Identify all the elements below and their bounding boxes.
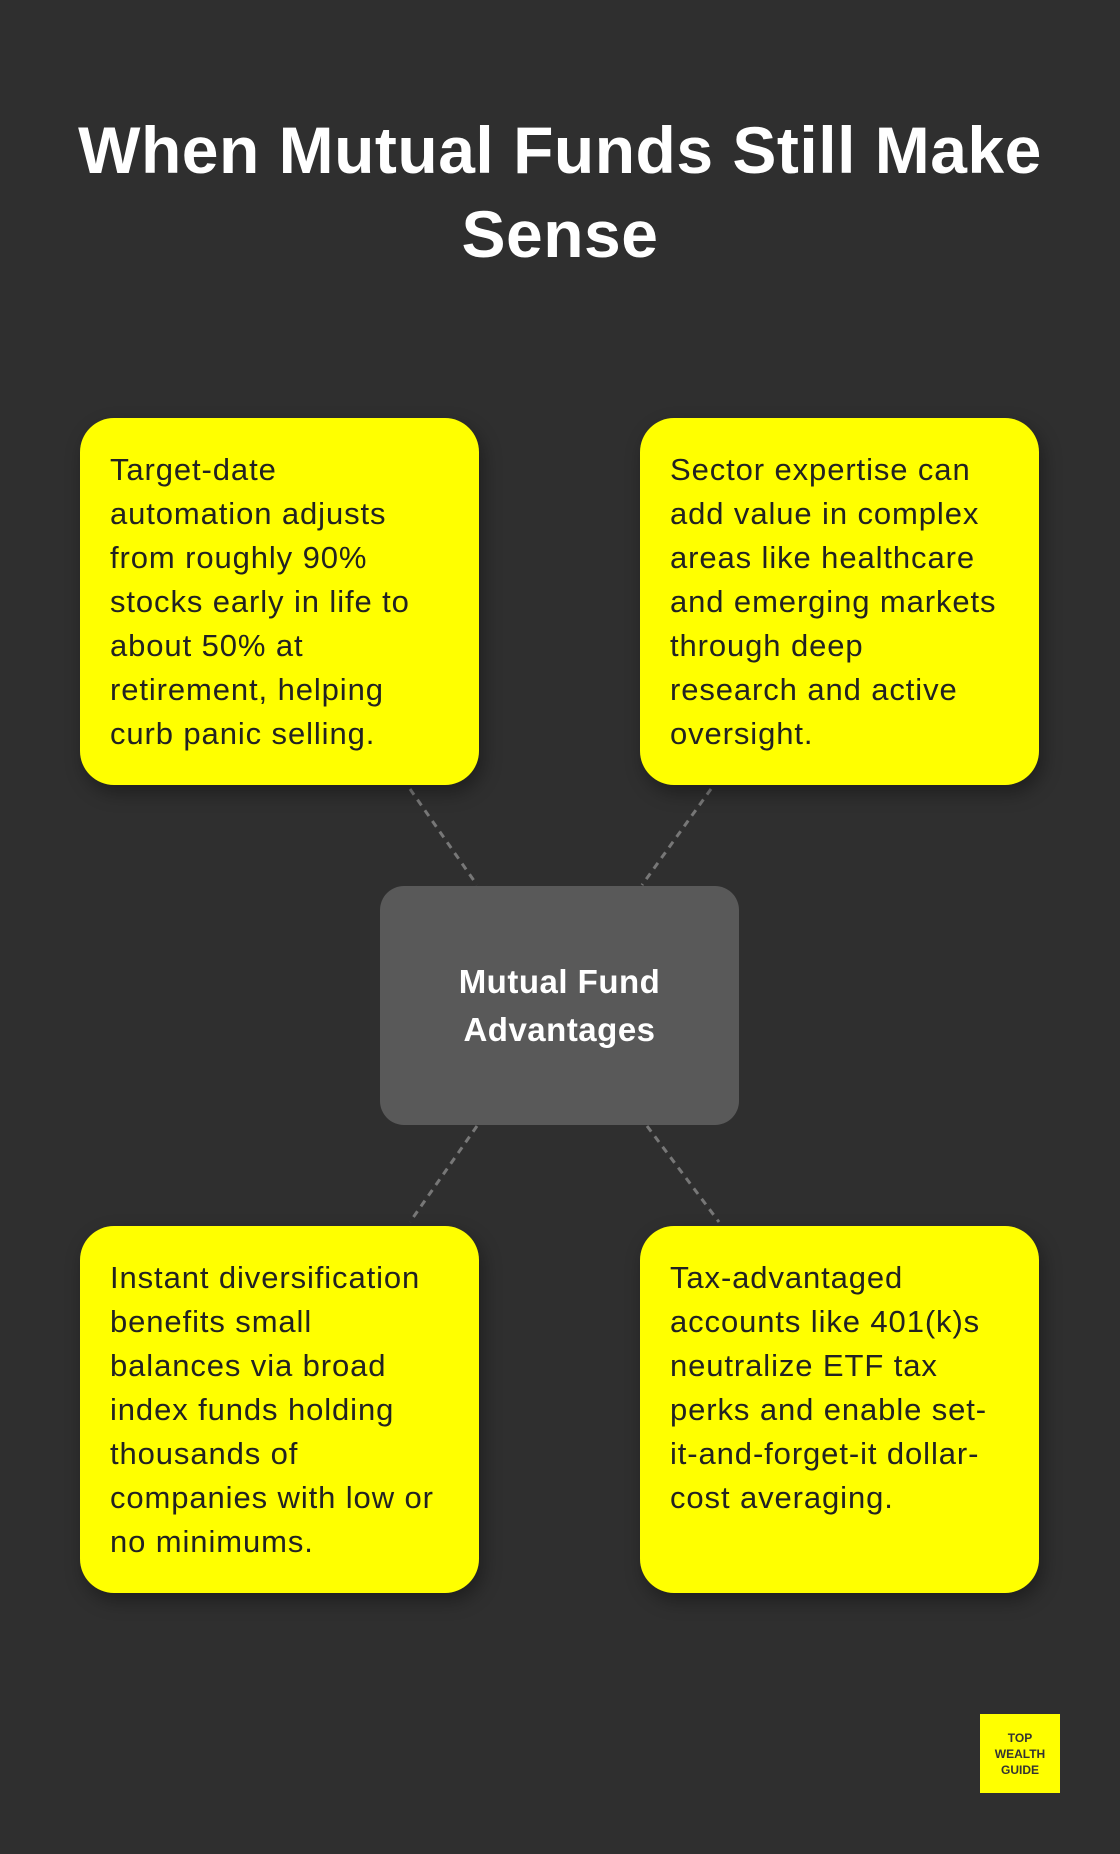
logo (980, 1714, 1060, 1793)
panel: sector expertise: through deep (670, 628, 864, 663)
panel: sector expertise: add value in complex (670, 496, 979, 531)
logo: TOP (1008, 1730, 1032, 1744)
panel: sector expertise (640, 418, 1039, 785)
title (78, 113, 1042, 271)
panel: target-date: from roughly 90% (110, 540, 367, 575)
panel: target-date: curb panic selling. (110, 716, 375, 751)
title: When Mutual Funds Still Make (78, 113, 1042, 187)
panel: tax-advantaged (640, 1226, 1039, 1593)
panel: diversification: no minimums. (110, 1524, 314, 1559)
panel: tax-advantaged: Tax-advantaged (670, 1260, 903, 1295)
panel: target-date: retirement, helping (110, 672, 384, 707)
panel: target-date: stocks early in life to (110, 584, 410, 619)
panel: tax-advantaged: perks and enable set- (670, 1392, 987, 1427)
panel: target-date: about 50% at (110, 628, 304, 663)
panel: target-date: automation adjusts (110, 496, 386, 531)
panel: sector expertise: Sector expertise can (670, 452, 971, 487)
panel: diversification (80, 1226, 479, 1593)
panel: target-date: Target-date (110, 452, 277, 487)
panel: tax-advantaged: neutralize ETF tax (670, 1348, 938, 1383)
logo: WEALTH (995, 1746, 1045, 1760)
panel: diversification: thousands of (110, 1436, 298, 1471)
panel: diversification: index funds holding (110, 1392, 394, 1427)
panel: sector expertise: oversight. (670, 716, 813, 751)
panel: tax-advantaged: it-and-forget-it dollar- (670, 1436, 979, 1471)
panel: diversification: balances via broad (110, 1348, 386, 1383)
panel: target-date (80, 418, 479, 785)
panel: sector expertise: areas like healthcare (670, 540, 975, 575)
panel: diversification: companies with low or (110, 1480, 434, 1515)
logo: GUIDE (1001, 1762, 1039, 1776)
title: Sense (462, 197, 658, 271)
panel: sector expertise: research and active (670, 672, 958, 707)
panel: tax-advantaged: cost averaging. (670, 1480, 894, 1515)
center node: Mutual Fund (459, 962, 660, 1000)
panel: diversification: benefits small (110, 1304, 312, 1339)
panel: sector expertise: and emerging markets (670, 584, 996, 619)
center node (380, 886, 739, 1125)
panel: diversification: Instant diversification (110, 1260, 420, 1295)
center node: Advantages (463, 1010, 656, 1048)
panel: tax-advantaged: accounts like 401(k)s (670, 1304, 980, 1339)
